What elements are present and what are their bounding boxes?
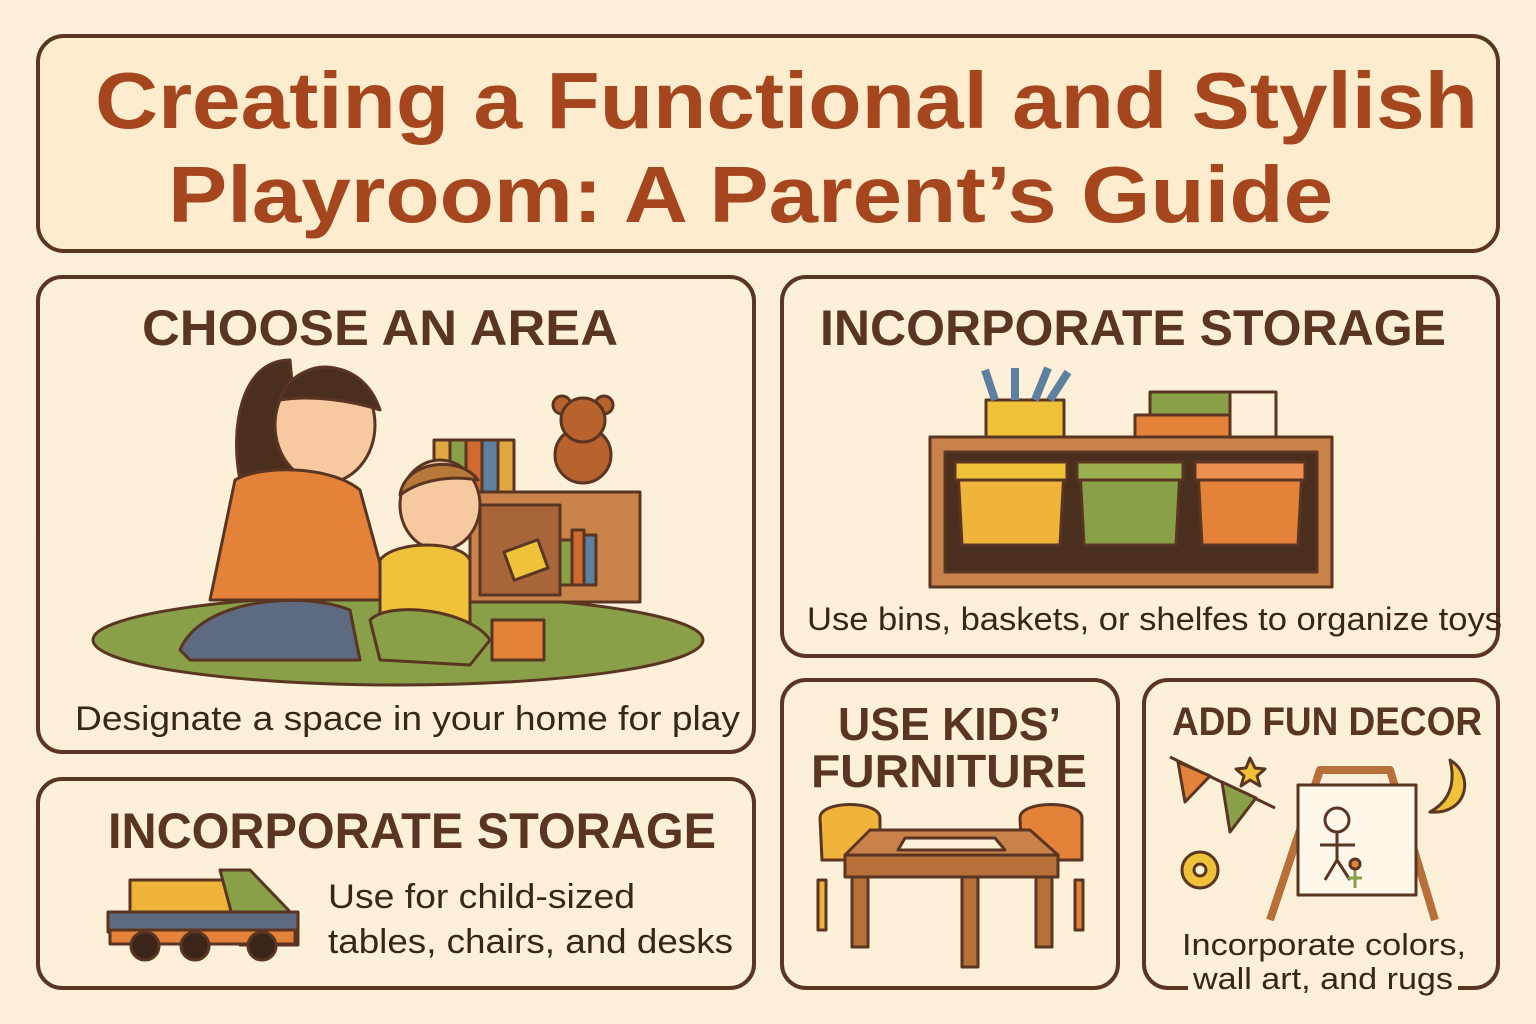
caption: choose an area: Designate a space in your home for play (75, 700, 740, 738)
illustration: storage shelf with bins (930, 368, 1332, 587)
caption: bottom storage: tables, chairs, and desks (328, 923, 733, 961)
heading: choose an area: CHOOSE AN AREA (142, 300, 618, 356)
heading: use kids' furniture: USE KIDS’ (838, 698, 1061, 750)
title: Creating a Functional and Stylish (95, 56, 1478, 145)
caption: fun decor: Incorporate colors, (1182, 927, 1466, 962)
panel: use kids furniture (782, 680, 1118, 988)
panel: add fun decor (1144, 680, 1498, 996)
caption: bottom storage: Use for child-sized (328, 878, 635, 916)
heading: use kids' furniture: FURNITURE (811, 745, 1087, 797)
heading: add fun decor: ADD FUN DECOR (1172, 700, 1482, 744)
heading: use kids' furniture (811, 698, 1087, 797)
panel: choose an area (38, 277, 754, 752)
title (38, 36, 1498, 251)
icon: toy truck (108, 870, 298, 960)
panel: incorporate storage (top) (782, 277, 1502, 656)
caption: storage: Use bins, baskets, or shelfes to organize toys (807, 601, 1502, 637)
heading: incorporate storage: INCORPORATE STORAGE (820, 300, 1446, 356)
panel: incorporate storage (bottom) (38, 779, 754, 988)
illustration: kids table and chairs (818, 804, 1083, 967)
illustration: bunting, easel, star, moon, flower (1170, 757, 1465, 920)
caption: fun decor (1182, 927, 1466, 996)
illustration: mother and child playing (93, 360, 703, 685)
caption: bottom storage (328, 878, 733, 961)
title: Playroom: A Parent’s Guide (168, 150, 1333, 239)
caption: fun decor: wall art, and rugs (1192, 961, 1453, 996)
heading: incorporate storage bottom: INCORPORATE STORAGE (108, 803, 716, 859)
